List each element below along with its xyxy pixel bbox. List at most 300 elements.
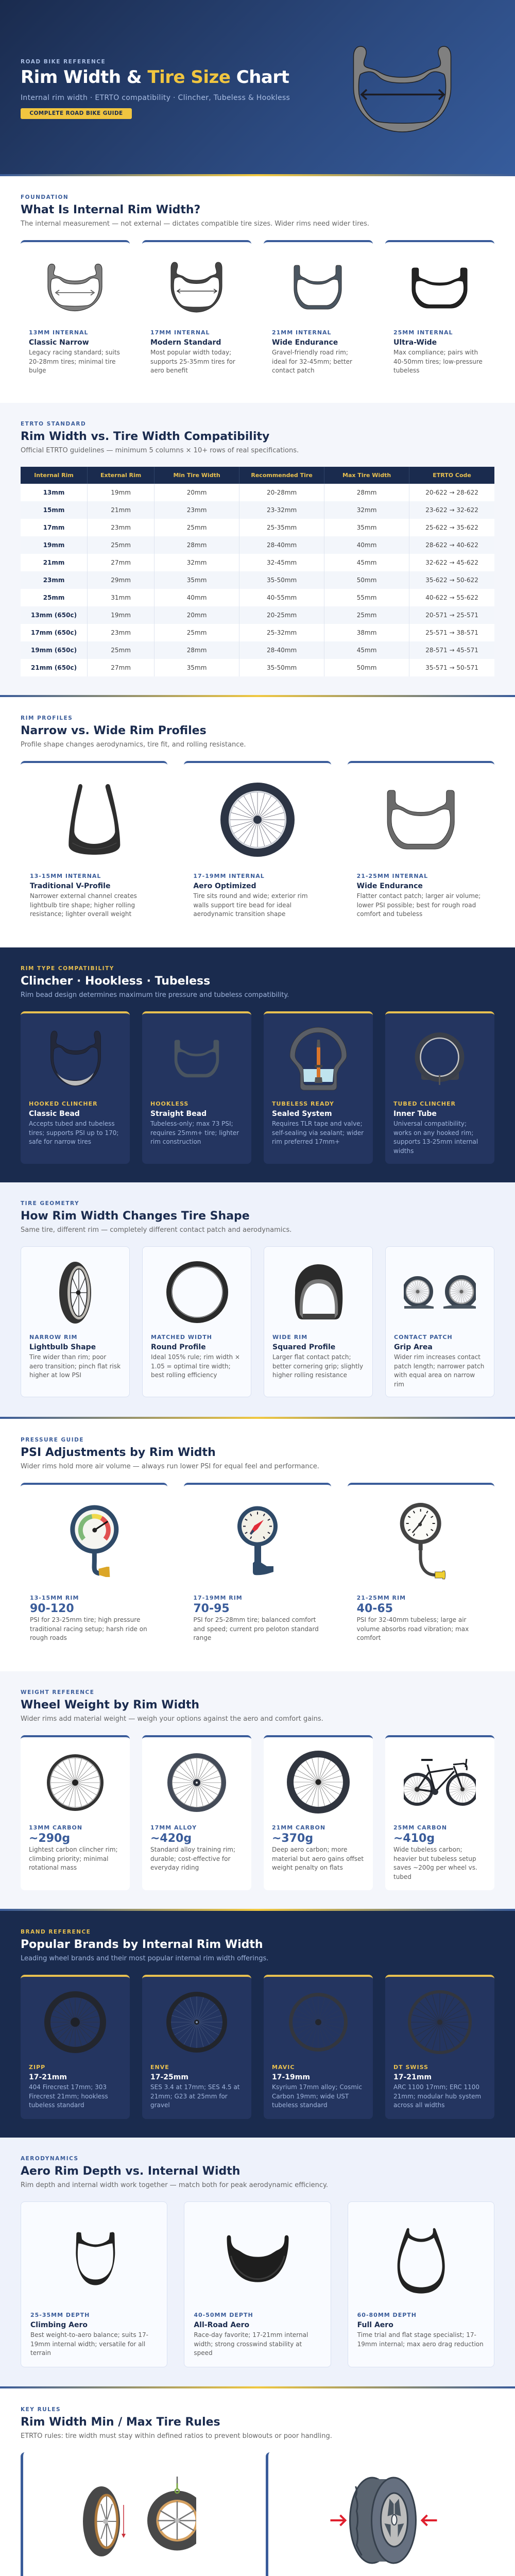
card: aero optimized <box>184 761 331 929</box>
section eyebrow: KEY RULES <box>21 2406 61 2413</box>
text: traditional v-profile: Narrower external channel creates <box>30 892 137 900</box>
text: Mavic: Carbon 19mm; wide UST <box>272 2093 349 2100</box>
card: wide endurance profile <box>348 761 494 929</box>
text: contact patch: with equal area on narrow <box>394 1371 475 1379</box>
text: DT Swiss: DT SWISS <box>393 2064 428 2071</box>
text: hookless: rim construction <box>150 1138 201 1145</box>
panel: popular brands <box>0 1911 515 2138</box>
text: DT Swiss: 17-21mm <box>393 2073 432 2081</box>
text: all-road aero: width; strong crosswind stability at <box>194 2341 302 2348</box>
compatibility table: 25mm <box>43 594 64 601</box>
text: climbing aero: terrain <box>30 2349 51 2357</box>
text: 13-15mm PSI: traditional racing setup; harsh ride on <box>30 1625 147 1633</box>
text: Mavic: tubeless standard <box>272 2102 328 2109</box>
text: ENVE: ENVE <box>150 2064 169 2071</box>
text: wide endurance: 21MM INTERNAL <box>272 329 332 336</box>
text: hookless: Straight Bead <box>150 1110 207 1118</box>
text: ultra-wide: 40-50mm tires; low-pressure <box>393 358 483 365</box>
compatibility table: 35-50mm <box>267 664 297 671</box>
panel: rim type compatibility <box>0 947 515 1182</box>
section eyebrow: RIM TYPE COMPATIBILITY <box>21 965 114 972</box>
section subtitle: Wider rims add material weight — weigh your options against the aero and comfort gains. <box>21 1715 323 1723</box>
text: DT Swiss: 21mm; modular hub system <box>393 2093 481 2100</box>
compatibility table: 25-35mm <box>267 524 297 531</box>
text: ENVE: 21mm; G23 at 25mm for <box>150 2093 228 2100</box>
compatibility table: 15mm <box>43 506 64 514</box>
icon: light carbon wheel <box>47 1754 104 1811</box>
text: wide endurance: ideal for 32-45mm; better <box>272 358 352 365</box>
compatibility table: 23-622 → 32-622 <box>425 506 478 514</box>
text: hooked clincher: HOOKED CLINCHER <box>29 1100 98 1107</box>
text: ENVE: 17-25mm <box>150 2073 188 2081</box>
text: all-road aero <box>194 2312 308 2358</box>
card: Zipp <box>21 1975 130 2119</box>
text: 13-15mm PSI: rough roads <box>30 1634 67 1641</box>
card: ENVE <box>142 1975 251 2119</box>
compatibility table: 27mm <box>111 664 131 671</box>
text: 17mm alloy: durable; cost-effective for <box>150 1855 230 1862</box>
card: 21mm carbon <box>264 1735 373 1890</box>
text: 25mm carbon: ~410g <box>393 1832 435 1845</box>
text: matched width: Ideal 105% rule; rim width × <box>151 1353 240 1361</box>
compatibility table: 25-622 → 35-622 <box>425 524 478 531</box>
card: 13-15mm rim <box>21 1483 167 1652</box>
compatibility table: 13mm (650c) <box>31 612 77 619</box>
icon: overhanging tire with arrows <box>319 2458 443 2576</box>
section heading: Rim Width vs. Tire Width Compatibility <box>21 430 269 443</box>
text: modern standard: Most popular width today; <box>150 349 231 356</box>
hero subtitle: Internal rim width · ETRTO compatibility · Clincher, Tubeless & Hookless <box>21 94 290 102</box>
card: hookless <box>142 1011 251 1164</box>
title: Rim Width & Tire Size Chart <box>21 67 289 88</box>
text: 17-19mm PSI: 17-19MM RIM <box>193 1595 243 1601</box>
compatibility table: External Rim <box>100 472 141 479</box>
text: 17mm alloy: ~420g <box>150 1832 192 1845</box>
text: wide endurance: contact patch <box>272 367 315 374</box>
compatibility table: 20mm <box>187 489 207 496</box>
text: narrow rim: higher at low PSI <box>29 1371 81 1379</box>
compatibility table: 40-622 → 55-622 <box>425 594 478 601</box>
section subtitle: ETRTO rules: tire width must stay within defined ratios to prevent blowouts or poor handling. <box>21 2432 332 2440</box>
section heading: Aero Rim Depth vs. Internal Width <box>21 2165 240 2178</box>
text: aero optimized: Aero Optimized <box>193 882 256 890</box>
compatibility table: ETRTO Code <box>433 472 471 479</box>
text: full aero: Time trial and flat stage specialist; 17- <box>357 2331 476 2338</box>
text: 21-25mm PSI: 21-25MM RIM <box>357 1595 406 1601</box>
text: hooked clincher: safe for narrow tires <box>29 1138 91 1145</box>
icon: contact patch comparison <box>404 1275 476 1309</box>
text: contact patch: patch length; narrower patch <box>394 1363 484 1370</box>
text: classic narrow: Legacy racing standard; suits <box>29 349 120 356</box>
text: 17mm alloy: Standard alloy training rim; <box>150 1846 235 1853</box>
card: tubed clincher <box>385 1011 494 1164</box>
compatibility table: 25mm <box>187 524 207 531</box>
section subtitle: Rim depth and internal width work together — match both for peak aerodynamic efficiency. <box>21 2181 328 2189</box>
text: tubed clincher: works on any hooked rim; <box>393 1129 473 1137</box>
text: modern standard: aero benefit <box>150 367 188 374</box>
compatibility table: 40mm <box>187 594 207 601</box>
text: contact patch: CONTACT PATCH <box>394 1334 453 1341</box>
icon: ultra-wide rim <box>412 268 468 308</box>
section eyebrow: WEIGHT REFERENCE <box>21 1689 94 1696</box>
card: minimum rule <box>21 2452 249 2576</box>
text: 17-19mm PSI <box>193 1595 319 1641</box>
text: 13mm carbon: Lightest carbon clincher rim; <box>29 1846 118 1853</box>
compatibility table: 23mm <box>111 524 131 531</box>
icon: hooked rim <box>50 1030 101 1086</box>
compatibility table: 19mm <box>43 541 64 549</box>
icon: full aero rim <box>374 2214 467 2307</box>
compatibility table: 35-571 → 50-571 <box>425 664 478 671</box>
icon: narrow tire on wide rim <box>73 2458 196 2576</box>
section eyebrow: FOUNDATION <box>21 194 68 200</box>
text: tubeless ready <box>272 1100 364 1145</box>
text: contact patch: rim <box>394 1381 404 1388</box>
card: tubeless ready <box>264 1011 373 1164</box>
section heading: Clincher · Hookless · Tubeless <box>21 975 210 988</box>
compatibility table: 23mm <box>187 506 207 514</box>
text: full aero: 60-80MM DEPTH <box>357 2312 417 2318</box>
text: classic narrow: 20-28mm tires; minimal tire <box>29 358 116 365</box>
compatibility table: 20mm <box>187 612 207 619</box>
text: 21mm carbon: 21MM CARBON <box>272 1824 325 1831</box>
section heading: Rim Width Min / Max Tire Rules <box>21 2416 220 2429</box>
text: contact patch: Grip Area <box>394 1343 433 1351</box>
card: 17mm <box>142 240 251 384</box>
card: wide rim <box>264 1246 373 1397</box>
compatibility table: 19mm <box>111 489 131 496</box>
text: 21-25mm PSI <box>357 1595 469 1641</box>
icon: alloy wheel <box>161 1747 233 1819</box>
icon: Zipp wheel <box>39 1986 111 2058</box>
text: ENVE: gravel <box>150 2102 170 2109</box>
text: traditional v-profile <box>30 873 137 918</box>
text: modern standard <box>150 329 235 374</box>
text: hookless: HOOKLESS <box>150 1100 188 1107</box>
compatibility table: 25-32mm <box>267 629 297 636</box>
compatibility table <box>21 467 494 676</box>
text: modern standard: Modern Standard <box>150 338 221 347</box>
text: 25mm carbon: tubed <box>393 1873 411 1880</box>
text: hookless: Tubeless-only; max 73 PSI; <box>150 1120 233 1127</box>
text: tubed clincher: Inner Tube <box>393 1110 437 1118</box>
text: full aero: 19mm internal; max aero drag reduction <box>357 2341 484 2348</box>
card: 21-25mm rim <box>348 1483 494 1652</box>
card: 40-50mm depth <box>184 2201 331 2367</box>
text: 17-19mm PSI: and speed; current pro peloton standard <box>193 1625 319 1633</box>
text: ultra-wide <box>393 329 483 374</box>
compatibility table: 25mm <box>357 612 376 619</box>
card: 25mm carbon <box>385 1735 494 1890</box>
panel: rim profiles <box>0 697 515 947</box>
compatibility table: 29mm <box>111 577 131 584</box>
compatibility table: 20-622 → 28-622 <box>425 489 478 496</box>
text: traditional v-profile: 13-15MM INTERNAL <box>30 873 101 879</box>
text: 25mm carbon <box>393 1824 477 1882</box>
section heading: What Is Internal Rim Width? <box>21 204 200 216</box>
text: modern standard: 17MM INTERNAL <box>150 329 210 336</box>
card: traditional v-profile <box>21 761 167 929</box>
compatibility table: 28mm <box>187 647 207 654</box>
section eyebrow: TIRE GEOMETRY <box>21 1200 79 1207</box>
card: contact patch <box>385 1246 494 1397</box>
text: ultra-wide: 25MM INTERNAL <box>393 329 453 336</box>
text: classic narrow <box>29 329 120 374</box>
section subtitle: The internal measurement — not external — dictates compatible tire sizes. Wider rims need wider tires. <box>21 220 369 228</box>
text: matched width <box>151 1334 240 1379</box>
compatibility table: 40-55mm <box>267 594 297 601</box>
text: ultra-wide: Max compliance; pairs with <box>393 349 478 356</box>
icon: classic narrow rim <box>47 264 102 311</box>
text: wide endurance profile: Wide Endurance <box>357 882 423 890</box>
compatibility table: 28-40mm <box>267 541 297 549</box>
panel: tire geometry <box>0 1182 515 1417</box>
compatibility table: 25mm <box>187 629 207 636</box>
text: 21-25mm PSI: comfort <box>357 1634 381 1641</box>
text: all-road aero: 40-50MM DEPTH <box>194 2312 253 2318</box>
text: Zipp: 404 Firecrest 17mm; 303 <box>29 2083 107 2091</box>
compatibility table: 20-571 → 25-571 <box>425 612 478 619</box>
panel: ETRTO compatibility table <box>0 403 515 695</box>
text: hookless: requires 25mm+ tire; lighter <box>150 1129 239 1137</box>
compatibility table: Min Tire Width <box>173 472 220 479</box>
compatibility table: 23-32mm <box>267 506 297 514</box>
text: wide endurance: Wide Endurance <box>272 338 338 347</box>
compatibility table: 20-28mm <box>267 489 297 496</box>
guide badge <box>21 108 132 119</box>
icon: hookless rim <box>174 1040 219 1078</box>
text: wide endurance profile <box>357 873 480 918</box>
compatibility table: 35-50mm <box>267 577 297 584</box>
text: wide rim: Squared Profile <box>272 1343 335 1351</box>
text: DT Swiss: across all widths <box>393 2102 444 2109</box>
hero eyebrow: ROAD BIKE REFERENCE <box>21 59 106 65</box>
text: Zipp <box>29 2064 108 2110</box>
compatibility table: 23mm <box>43 577 64 584</box>
section subtitle: Wider rims hold more air volume — always run lower PSI for equal feel and performance. <box>21 1463 319 1470</box>
text: 25mm carbon: saves ~200g per wheel vs. <box>393 1864 477 1871</box>
text: ultra-wide: Ultra-Wide <box>393 338 437 347</box>
panel: wheel weight <box>0 1671 515 1909</box>
text: wide endurance: Gravel-friendly road rim; <box>272 349 348 356</box>
text: 13-15mm PSI: PSI for 23-25mm tire; high pressure <box>30 1616 140 1623</box>
compatibility table: 28mm <box>357 489 376 496</box>
card: 17mm alloy <box>142 1735 251 1890</box>
text: climbing aero <box>30 2312 148 2358</box>
compatibility table: 28-571 → 45-571 <box>425 647 478 654</box>
text: 21-25mm PSI: 40-65 <box>357 1602 393 1615</box>
card: 60-80mm depth <box>348 2201 494 2367</box>
compatibility table: 28-622 → 40-622 <box>425 541 478 549</box>
text: wide endurance profile: comfort and tubeless <box>357 910 422 918</box>
text: wide endurance <box>272 329 352 374</box>
panel: aero rim depth <box>0 2138 515 2386</box>
compatibility table: 23mm <box>111 629 131 636</box>
text: Mavic: 17-19mm <box>272 2073 310 2081</box>
card: DT Swiss <box>385 1975 494 2119</box>
text: 17mm alloy: everyday riding <box>150 1864 199 1871</box>
text: all-road aero: speed <box>194 2349 213 2357</box>
compatibility table: 31mm <box>111 594 131 601</box>
icon: wide rim profile <box>387 790 455 849</box>
text: wide rim: better cornering grip; slightly <box>272 1363 363 1370</box>
compatibility table: 55mm <box>357 594 376 601</box>
text: contact patch: Wider rim increases contact <box>394 1353 480 1361</box>
icon: ENVE wheel <box>161 1986 233 2058</box>
text: 17mm alloy: 17MM ALLOY <box>150 1824 197 1831</box>
text: Mavic <box>272 2064 362 2110</box>
text: aero optimized: Tire sits round and wide; exterior rim <box>193 892 308 900</box>
text: wide rim: higher rolling resistance <box>272 1371 347 1379</box>
compatibility table: 35-622 → 50-622 <box>425 577 478 584</box>
text: Zipp: ZIPP <box>29 2064 45 2071</box>
text: modern standard: supports 25-35mm tires for <box>150 358 235 365</box>
compatibility table: 13mm <box>43 489 64 496</box>
section heading: Popular Brands by Internal Rim Width <box>21 1938 263 1951</box>
text: wide rim <box>272 1334 363 1379</box>
icon: tubeless section with valve and sealant <box>289 1027 347 1090</box>
text: hooked clincher: tires; supports PSI up to 170; <box>29 1129 118 1137</box>
text: tubeless ready: Requires TLR tape and valve; <box>272 1120 363 1127</box>
compatibility table: 40mm <box>357 541 376 549</box>
text: narrow rim: NARROW RIM <box>29 1334 77 1341</box>
text: 13mm carbon: ~290g <box>29 1832 70 1845</box>
text: 21mm carbon: ~370g <box>272 1832 313 1845</box>
section heading: How Rim Width Changes Tire Shape <box>21 1210 250 1223</box>
compatibility table: Internal Rim <box>34 472 74 479</box>
text: wide rim: Larger flat contact patch; <box>272 1353 351 1361</box>
text: hookless <box>150 1100 239 1145</box>
icon: inner tube <box>415 1032 465 1085</box>
text: Zipp: Firecrest 21mm; hookless <box>29 2093 108 2100</box>
icon: aero wheel <box>220 783 295 857</box>
compatibility table: 21mm <box>43 559 64 566</box>
card: 25-35mm depth <box>21 2201 167 2367</box>
text: classic narrow: bulge <box>29 367 46 374</box>
text: tubeless ready: Sealed System <box>272 1110 332 1118</box>
text: 25mm carbon: 25MM CARBON <box>393 1824 447 1831</box>
card: 21mm <box>264 240 373 384</box>
text: 17mm alloy <box>150 1824 235 1873</box>
compatibility table: 50mm <box>357 577 376 584</box>
icon: squared tire profile <box>295 1264 343 1319</box>
text: 13mm carbon: 13MM CARBON <box>29 1824 82 1831</box>
card: hooked clincher <box>21 1011 130 1164</box>
icon: Mavic wheel <box>282 1986 354 2058</box>
text: contact patch <box>394 1334 484 1388</box>
section heading: Narrow vs. Wide Rim Profiles <box>21 724 207 737</box>
text: narrow rim <box>29 1334 121 1379</box>
text: DT Swiss <box>393 2064 481 2110</box>
section heading: Wheel Weight by Rim Width <box>21 1699 199 1711</box>
text: full aero <box>357 2312 484 2349</box>
section eyebrow: PRESSURE GUIDE <box>21 1437 84 1443</box>
text: tubeless ready: TUBELESS READY <box>272 1100 334 1107</box>
text: Mavic: Ksyrium 17mm alloy; Cosmic <box>272 2083 362 2091</box>
text: matched width: 1.05 = optimal tire width; <box>151 1363 231 1370</box>
icon: dial gauge <box>237 1506 278 1575</box>
text: narrow rim: aero transition; pinch flat risk <box>29 1363 121 1370</box>
icon: modern standard rim <box>170 262 222 312</box>
compatibility table: 35mm <box>187 577 207 584</box>
text: DT Swiss: ARC 1100 17mm; ERC 1100 <box>393 2083 479 2091</box>
icon: all-road aero rim <box>211 2214 304 2307</box>
compatibility table: 17mm (650c) <box>31 629 77 636</box>
text: 13mm carbon <box>29 1824 118 1873</box>
text: climbing aero: 25-35MM DEPTH <box>30 2312 90 2318</box>
icon: v-profile rim <box>68 784 121 855</box>
text: 21mm carbon: weight penalty on flats <box>272 1864 343 1871</box>
text: 25mm carbon: heavier but tubeless setup <box>393 1855 476 1862</box>
section eyebrow: BRAND REFERENCE <box>21 1929 91 1935</box>
icon: wide endurance rim <box>294 265 342 309</box>
icon: hose gauge <box>400 1503 446 1580</box>
text: tubeless ready: rim preferred 17mm+ <box>272 1138 340 1145</box>
text: classic narrow: 13MM INTERNAL <box>29 329 89 336</box>
text: wide endurance profile: 21-25MM INTERNAL <box>357 873 428 879</box>
panel: PSI adjustments <box>0 1419 515 1671</box>
text: tubed clincher: supports 13-25mm internal <box>393 1138 478 1145</box>
icon: deep aero wheel <box>282 1747 354 1819</box>
text: 17-19mm PSI: PSI for 25-28mm tire; balanced comfort <box>193 1616 316 1623</box>
card: matched width <box>142 1246 251 1397</box>
card: 17-19mm rim <box>184 1483 331 1652</box>
text: 25mm carbon: Wide tubeless carbon; <box>393 1846 462 1853</box>
text: aero optimized: 17-19MM INTERNAL <box>193 873 265 879</box>
compatibility table: 25mm <box>111 647 131 654</box>
compatibility table: 21mm <box>111 506 131 514</box>
section subtitle: Official ETRTO guidelines — minimum 5 columns × 10+ rows of real specifications. <box>21 447 299 454</box>
text: Zipp: tubeless standard <box>29 2102 84 2109</box>
section subtitle: Leading wheel brands and their most popular internal rim width offerings. <box>21 1955 268 1962</box>
text: traditional v-profile: resistance; lighter overall weight <box>30 910 131 918</box>
text: ultra-wide: tubeless <box>393 367 420 374</box>
panel: min max tire rules <box>0 2388 515 2576</box>
text: matched width: MATCHED WIDTH <box>151 1334 212 1341</box>
compatibility table: 28-40mm <box>267 647 297 654</box>
compatibility table: 25-571 → 38-571 <box>425 629 478 636</box>
text: tubed clincher: Universal compatibility; <box>393 1120 467 1127</box>
icon: round tire profile <box>166 1261 228 1323</box>
text: tubed clincher <box>393 1100 478 1155</box>
text: ENVE: SES 3.4 at 17mm; SES 4.5 at <box>150 2083 240 2091</box>
text: climbing aero: 19mm internal width; versatile for all <box>30 2341 145 2348</box>
text: aero optimized: walls support tire bead for ideal <box>193 902 291 909</box>
panel: what is internal rim width <box>0 176 515 403</box>
section eyebrow: ETRTO STANDARD <box>21 421 86 427</box>
text: 21-25mm PSI: volume absorbs road vibration; max <box>357 1625 469 1633</box>
text: climbing aero: Best weight-to-aero balance; suits 17- <box>30 2331 148 2338</box>
compatibility table: 35mm <box>357 524 376 531</box>
text: 13mm carbon: climbing priority; minimal <box>29 1855 108 1862</box>
text: wide endurance profile: Flatter contact patch; larger air volume; <box>357 892 480 900</box>
icon: DT Swiss wheel <box>404 1986 476 2058</box>
compatibility table: 32-622 → 45-622 <box>425 559 478 566</box>
text: hooked clincher: Classic Bead <box>29 1110 80 1118</box>
text: matched width: best rolling efficiency <box>151 1371 217 1379</box>
text: 17-19mm PSI: 70-95 <box>193 1602 230 1615</box>
text: 13-15mm PSI <box>30 1595 147 1641</box>
compatibility table: 19mm <box>111 612 131 619</box>
compatibility table: 17mm <box>43 524 64 531</box>
compatibility table: Recommended Tire <box>251 472 313 479</box>
section subtitle: Same tire, different rim — completely different contact patch and aerodynamics. <box>21 1226 291 1234</box>
text: 13mm carbon: rotational mass <box>29 1864 77 1871</box>
text: narrow rim: Lightbulb Shape <box>29 1343 96 1351</box>
icon: color gauge <box>70 1505 118 1577</box>
icon: lightbulb tire <box>59 1262 91 1324</box>
text: classic narrow: Classic Narrow <box>29 338 89 347</box>
